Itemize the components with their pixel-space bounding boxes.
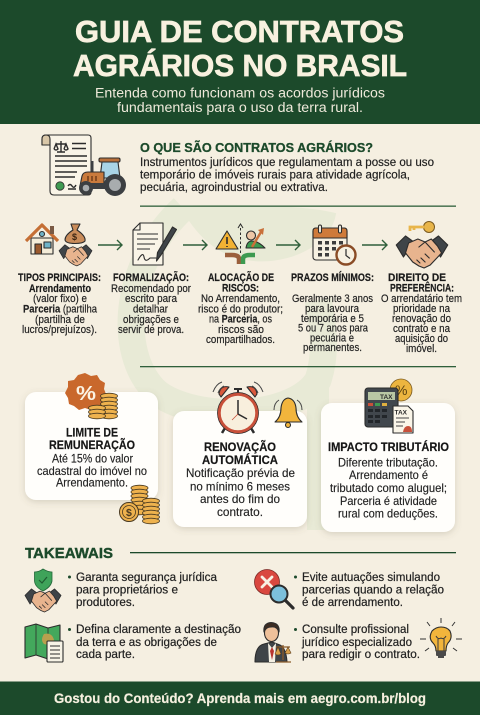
panel: impacto tributário (321, 403, 455, 532)
takeaway: destinação da terra: da terra e as obrigações de (76, 635, 217, 649)
step 5: direito de preferência: aquisição do (395, 333, 448, 345)
step 4: prazos mínimos: 5 ou 7 anos para (298, 322, 368, 334)
step 3: alocação de riscos: RISCOS: (222, 282, 259, 294)
icon: calculator, percent and tax form (365, 379, 413, 433)
takeaway: consultar profissional: jurídico especializado (301, 635, 412, 649)
step 2: formalização: escrito para (125, 293, 177, 305)
panel: impacto tributário: IMPACTO TRIBUTÁRIO (328, 439, 449, 454)
step 3: alocação de riscos: riscos são (218, 324, 264, 336)
takeaway: consultar profissional (294, 622, 420, 661)
panel: limite de remuneração: Até 15% do valor (52, 452, 133, 466)
step 4: prazos mínimos: pecuária e (310, 332, 354, 344)
panel: limite de remuneração: LIMITE DE (66, 426, 118, 440)
title (73, 15, 407, 83)
step 1: tipos principais (18, 272, 101, 336)
step 4: prazos mínimos: permanentes. (303, 342, 362, 354)
icon: shield and handshake (25, 569, 61, 612)
takeaway: segurança jurídica: produtores. (76, 595, 135, 609)
step 1: tipos principais: (partilha de (35, 314, 85, 326)
icon: percent badge with coins (65, 373, 118, 419)
panel: renovação automática: contrato. (217, 505, 263, 519)
subtitle: Entenda como funcionam os acordos jurídicos (95, 86, 385, 102)
step 1: tipos principais: (valor fixo) e (33, 293, 87, 305)
step 5: direito de preferência: DIREITO DE (388, 272, 446, 284)
step 5: direito de preferência: renovação do (392, 313, 451, 325)
step 4: prazos mínimos: para lavoura (305, 303, 359, 315)
step 5: direito de preferência: contrato e na (393, 323, 450, 335)
step 5: direito de preferência: imóvel. (406, 343, 437, 355)
panel: impacto tributário: Arrendamento é (349, 468, 428, 482)
step 2: formalização: servir de prova. (118, 324, 184, 336)
icon: lawyer with scales (255, 622, 291, 662)
icon: alarm clock (213, 382, 263, 434)
step 1: tipos principais: Arrendamento (29, 283, 91, 295)
arrow 1 (98, 240, 122, 250)
icon: coins and dollar (120, 485, 160, 524)
step 4: prazos mínimos: PRAZOS MÍNIMOS: (291, 271, 374, 284)
title: GUIA DE CONTRATOS (75, 15, 404, 49)
icon: error and magnifier (254, 570, 293, 608)
header banner (0, 0, 480, 124)
step 1: tipos principais: lucros/prejuízos). (22, 324, 97, 336)
icon: coins and dollar: $ (126, 507, 132, 519)
step 2: formalização: detalhar (133, 304, 168, 316)
icon: calculator, percent and tax form: TAX (394, 410, 408, 416)
subtitle (95, 86, 385, 116)
step 2: formalização: obrigações e (123, 314, 179, 326)
icon: contract and tractor (42, 135, 126, 196)
step 3: alocação de riscos: na Parceria, os (209, 314, 273, 326)
panel: renovação automática: Notificação prévia de (186, 466, 295, 480)
step 4: prazos mínimos (291, 271, 374, 354)
panel: limite de remuneração: Arrendamento. (56, 476, 128, 490)
icon: calculator, percent and tax form: TAX (380, 394, 393, 401)
icon: calculator, percent and tax form: % (395, 382, 407, 398)
panel: renovação automática: antes do fim do (200, 492, 280, 506)
arrow 4 (362, 240, 387, 250)
step 3: alocação de riscos: ALOCAÇÃO DE (208, 271, 274, 284)
heading: takeaways: TAKEAWAIS (25, 545, 113, 562)
panel: impacto tributário: Parceria é atividade (340, 494, 437, 508)
footer banner: Gostou do Conteúdo? Aprenda mais em aegro.com.br/blog (54, 690, 426, 706)
step 5: direito de preferência: prioridade na (393, 303, 450, 315)
intro text: temporário de imóveis rurais para atividade agrícola, (140, 168, 410, 182)
arrow 2 (183, 240, 207, 250)
panel: impacto tributário: tributado como aluguel; (330, 481, 447, 495)
takeaway: evitar autuações: parcerias quando a relação (302, 582, 444, 596)
step 5: direito de preferência: O arrendatário tem (381, 293, 462, 305)
icon: signed document and pen (133, 223, 176, 265)
icon: percent badge with coins: % (76, 383, 96, 405)
section heading: o que são: O QUE SÃO CONTRATOS AGRÁRIOS? (140, 140, 373, 155)
takeaway: evitar autuações (294, 570, 444, 609)
panel: limite de remuneração: cadastral do imóvel no (37, 464, 147, 478)
takeaway: evitar autuações: Evite autuações simulando (302, 570, 440, 584)
step 3: alocação de riscos: No Arrendamento, (201, 293, 280, 305)
panel: renovação automática: AUTOMÁTICA (202, 452, 278, 467)
panel: impacto tributário: rural com deduções. (338, 507, 438, 521)
step 3: alocação de riscos: risco é do produtor; (198, 303, 283, 315)
takeaway: destinação da terra: cada parte. (76, 647, 135, 661)
title: AGRÁRIOS NO BRASIL (73, 48, 407, 83)
panel: impacto tributário: Diferente tributação. (338, 456, 438, 470)
panel: renovação automática (173, 411, 307, 527)
takeaway: evitar autuações: é de arrendamento. (302, 595, 403, 609)
step 1: tipos principais: TIPOS PRINCIPAIS: (18, 272, 101, 284)
step 2: formalização: FORMALIZAÇÃO: (113, 271, 189, 284)
intro text: pecuária, agroindustrial ou extrativa. (140, 180, 328, 194)
step 2: formalização (111, 271, 191, 336)
icon: handshake with key (396, 222, 448, 268)
watermark: pale leaf ring (131, 206, 335, 530)
icon: house, money bag and handshake: $ (72, 232, 77, 242)
step 1: tipos principais: Parceria (partilha (23, 304, 97, 316)
icon: bell (274, 398, 302, 428)
takeaway: segurança jurídica (68, 570, 217, 609)
step 5: direito de preferência: PREFERÊNCIA: (390, 282, 454, 294)
takeaway: segurança jurídica: para proprietários e (76, 582, 178, 596)
step 4: prazos mínimos: temporária e 5 (301, 313, 364, 325)
footer banner (0, 682, 480, 715)
takeaway: consultar profissional: Consulte profissional (302, 622, 409, 636)
icon: calendar and clock (313, 225, 356, 264)
takeaway: consultar profissional: para redigir o contrato. (302, 647, 420, 661)
step 5: direito de preferência (381, 272, 462, 355)
intro text (140, 155, 434, 194)
step 3: alocação de riscos: compartilhados. (206, 334, 275, 346)
step 3: alocação de riscos (198, 271, 283, 346)
takeaway: destinação da terra: Defina claramente a destinação (76, 622, 241, 636)
subtitle: fundamentais para o uso da terra rural. (117, 100, 363, 116)
panel: renovação automática: no mínimo 6 meses (190, 480, 290, 494)
panel: limite de remuneração: REMUNERAÇÃO (49, 437, 135, 452)
icon: risk allocation (216, 224, 265, 264)
arrow 3 (276, 240, 300, 250)
panel: renovação automática: RENOVAÇÃO (204, 439, 276, 454)
icon: light bulb (420, 618, 462, 657)
step 4: prazos mínimos: Geralmente 3 anos (292, 293, 374, 305)
icon: house, money bag and handshake (26, 224, 92, 266)
step 2: formalização: Recomendado por (111, 283, 191, 295)
takeaway: segurança jurídica: Garanta segurança jurídica (76, 570, 217, 584)
panel: limite de remuneração (25, 392, 158, 500)
takeaway: destinação da terra (68, 622, 241, 661)
intro text: Instrumentos jurídicos que regulamentam a posse ou uso (140, 155, 434, 169)
icon: map and checklist (25, 624, 63, 662)
